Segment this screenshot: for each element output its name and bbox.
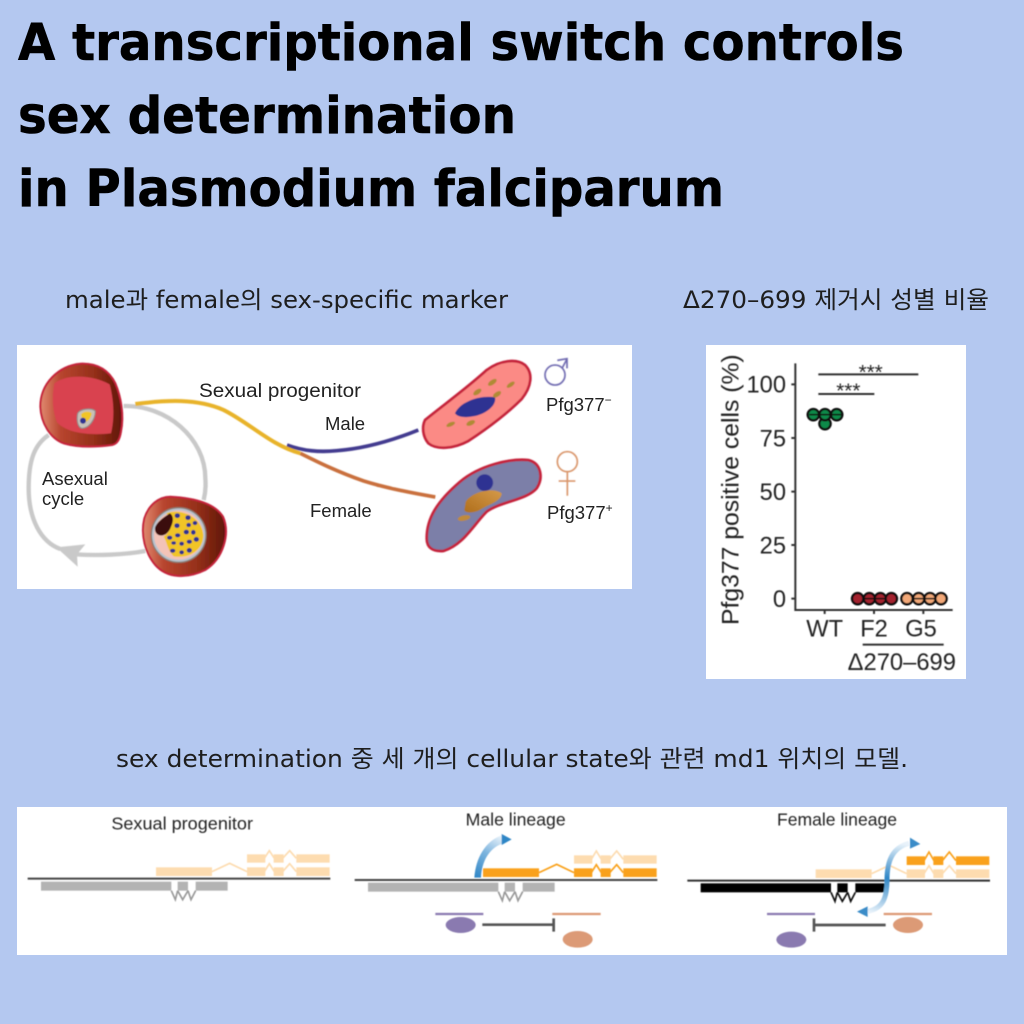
icon: female symbol [557,452,577,496]
caption: sex ratio after deletion: Δ270–699 제거시 성별 비율 [683,286,989,314]
icon: schizont infected cell [143,497,226,576]
labels: life cycle: + [606,501,613,515]
panel: md1 locus model [17,807,1007,955]
x axis labels: Δ270–699 [848,650,956,676]
icon: ring-stage infected cell [40,364,122,447]
x axis labels: G5 [905,617,937,643]
labels: life cycle: Female [310,500,372,521]
state: sexual progenitor [28,813,330,900]
title: in Plasmodium falciparum [18,160,724,219]
state: female lineage [687,810,990,948]
caption: md1 model: sex determination 중 세 개의 cellular state와 관련 md1 위치의 모델. [116,745,908,773]
significance brackets: *** [859,361,883,384]
chart axes [791,363,953,614]
x axis labels [806,617,956,676]
panel: life cycle diagram [17,345,632,589]
y axis tick labels: 0 [773,587,786,613]
labels: life cycle: Pfg377 [547,502,606,523]
x axis labels: WT [806,617,843,643]
y axis tick labels: 100 [747,373,786,399]
icon: male symbol [545,359,567,385]
y axis tick labels [747,373,786,613]
state: female lineage: Female lineage [777,810,897,830]
labels: life cycle: Asexual [42,468,108,489]
data points: WT [808,409,842,429]
caption: sex-specific marker: male과 female의 sex-specific marker [65,286,508,314]
labels: life cycle: Male [325,413,365,434]
labels: life cycle: Sexual progenitor [199,381,362,402]
y axis title: Pfg377 positive cells (%) [717,354,744,625]
labels: life cycle [42,381,613,523]
labels: life cycle: Pfg377 [546,394,605,415]
state: sexual progenitor: Sexual progenitor [111,813,253,833]
arrow: sexual progenitor path [135,401,300,453]
arrow: male branch [287,430,418,451]
y axis tick labels: 50 [760,480,786,506]
title: A transcriptional switch controls [18,14,904,73]
state: male lineage [355,810,657,948]
y axis tick labels: 25 [760,533,786,559]
panel: dot plot [706,345,966,679]
labels: life cycle: − [605,393,612,407]
icon: male gametocyte [423,361,530,448]
data points: G5 [901,593,947,604]
data points: F2 [852,593,897,604]
icon: female gametocyte [427,460,540,551]
significance brackets: *** [836,379,860,402]
y axis tick labels: 75 [760,426,786,452]
arrow: female branch [300,453,435,497]
significance brackets [818,361,918,402]
state: male lineage: Male lineage [466,810,566,830]
title [18,14,904,219]
x axis labels: F2 [860,617,888,643]
title: sex determination [18,87,516,146]
labels: life cycle: cycle [42,488,84,509]
arrow: asexual cycle loop [29,406,206,567]
